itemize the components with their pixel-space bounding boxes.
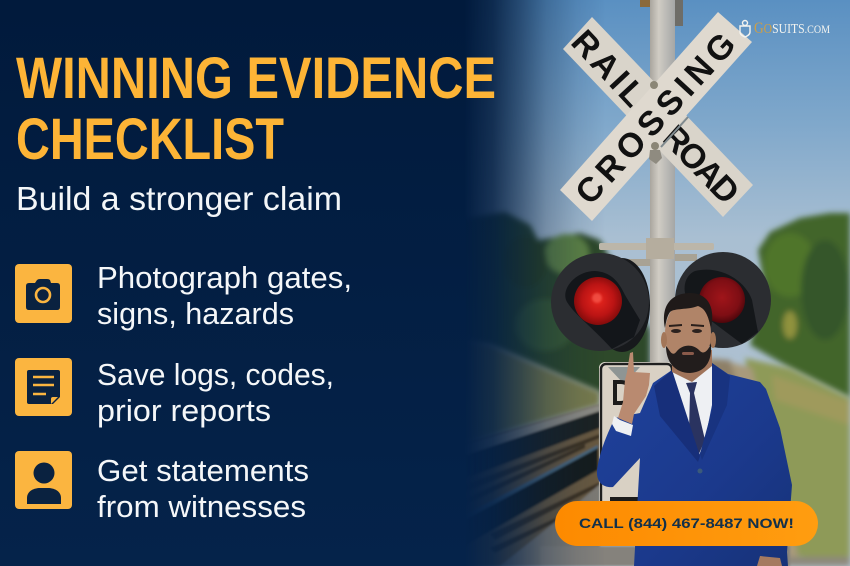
shirt collar and front — [672, 363, 714, 458]
checklist item: save logs: Save logs, codes, — [97, 357, 334, 392]
jacket button — [698, 468, 702, 474]
crossbuck sign — [560, 12, 753, 221]
railway tracks — [440, 404, 790, 566]
icon: camera — [15, 264, 72, 323]
warning sign behind the man — [599, 362, 673, 510]
icon: person — [15, 451, 72, 509]
left tree line — [440, 212, 650, 410]
checklist item: save logs: prior reports — [97, 393, 271, 428]
left navy panel with soft fade — [0, 0, 620, 566]
right signal light — [675, 252, 771, 348]
suit — [597, 363, 792, 566]
tie — [686, 382, 705, 456]
railroad board: RAIL — [564, 23, 653, 115]
beard — [666, 344, 711, 373]
bolts — [649, 81, 688, 164]
call to action button — [555, 501, 818, 546]
checklist item: witnesses: from witnesses — [97, 489, 306, 524]
watch hand — [757, 556, 782, 566]
left signal light — [551, 253, 650, 352]
checklist item: save logs — [15, 357, 334, 428]
checklist item: photograph: Photograph gates, — [97, 260, 352, 295]
cuff — [612, 416, 633, 436]
raised hand with finger — [618, 352, 650, 424]
neck — [672, 350, 712, 382]
checklist item: witnesses — [15, 451, 309, 524]
checklist item: photograph: signs, hazards — [97, 296, 294, 331]
right grass and ballast path — [680, 358, 850, 566]
subtitle: Build a stronger claim — [16, 180, 342, 217]
railroad board — [563, 17, 753, 217]
crossing board: CROSSING — [568, 25, 743, 212]
checklist item: witnesses: Get statements — [97, 453, 309, 488]
title: WINNING EVIDENCE — [16, 46, 496, 111]
title: CHECKLIST — [16, 107, 284, 172]
right tree line — [750, 213, 850, 398]
icon: document — [15, 358, 72, 416]
title — [16, 46, 496, 172]
eyes and mouth — [669, 325, 704, 355]
call to action button: CALL (844) 467-8487 NOW! — [579, 515, 794, 531]
checklist item: photograph — [15, 260, 352, 331]
logo lock icon — [740, 20, 750, 37]
railroad board: ROAD — [654, 118, 747, 212]
lapels — [654, 370, 700, 462]
head — [665, 300, 711, 368]
signal mast — [599, 0, 714, 365]
left grass — [440, 335, 600, 450]
photo background: railroad scene — [400, 0, 850, 566]
GoSuits logo: GOSUITS.COM — [754, 20, 830, 37]
man in blue suit — [597, 293, 792, 566]
hair — [664, 293, 712, 328]
